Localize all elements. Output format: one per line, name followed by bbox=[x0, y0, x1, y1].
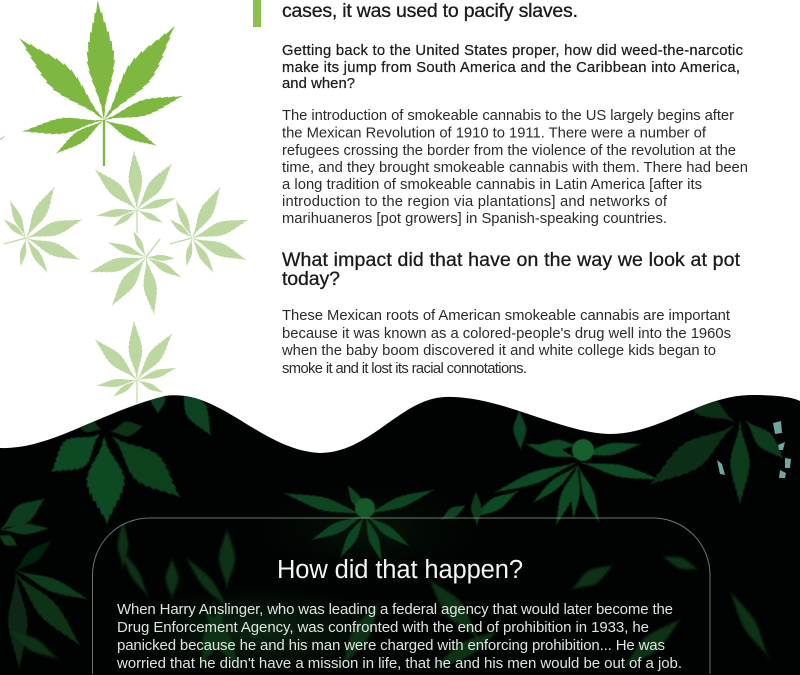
accent bar bbox=[253, 0, 261, 27]
leaves: faint inside box bbox=[5, 520, 776, 675]
impact paragraph: when the baby boom discovered it and white college kids began to bbox=[281, 343, 716, 359]
answer paragraph: refugees crossing the border from the violence of the revolution at the bbox=[282, 143, 736, 159]
impact paragraph: because it was known as a colored-people's drug well into the 1960s bbox=[282, 326, 731, 342]
question text: and when? bbox=[282, 76, 355, 92]
question text: make its jump from South America and the Caribbean into America, bbox=[282, 60, 740, 76]
answer paragraph: introduction to the region via plantations] and networks of bbox=[282, 194, 668, 210]
icon: pale cannabis leaves bbox=[0, 150, 261, 403]
heading: what impact: today? bbox=[282, 268, 340, 290]
answer paragraph: the Mexican Revolution of 1910 to 1911. There were a number of bbox=[282, 126, 707, 142]
leaf: upper left large bbox=[51, 396, 212, 524]
answer paragraph: a long tradition of smokeable cannabis in Latin America [after its bbox=[282, 177, 702, 193]
panel: rounded outline box bbox=[92, 518, 710, 674]
flower: centre bbox=[281, 482, 437, 564]
flower: upper right of centre bbox=[469, 437, 662, 528]
impact paragraph: smoke it and it lost its racial connotations. bbox=[282, 361, 527, 377]
answer paragraph: time, and they brought smokeable cannabis with them. There had been bbox=[282, 160, 748, 176]
intro text: cases, it was used to pacify slaves. bbox=[282, 0, 578, 22]
icon: large cannabis leaf bbox=[10, 0, 186, 166]
heading: how did that happen: How did that happen? bbox=[277, 556, 523, 584]
answer paragraph: marihuaneros [pot growers] in Spanish-speaking countries. bbox=[282, 211, 667, 227]
impact paragraph: These Mexican roots of American smokeable cannabis are important bbox=[282, 308, 730, 324]
box paragraph: Drug Enforcement Agency, was confronted with the end of prohibition in 1933, he bbox=[117, 619, 649, 636]
leaf: upper right dark bbox=[440, 400, 784, 526]
question text: Getting back to the United States proper, how did weed-the-narcotic bbox=[282, 43, 744, 59]
answer paragraph bbox=[282, 108, 748, 227]
panel: dark wave with cannabis photo background bbox=[0, 376, 800, 675]
specks: teal highlights bbox=[717, 421, 791, 478]
leaf: left edge bbox=[0, 490, 92, 670]
box paragraph: When Harry Anslinger, who was leading a federal agency that would later become the bbox=[117, 601, 673, 618]
heading: what impact: What impact did that have on the way we look at pot bbox=[282, 249, 741, 271]
answer paragraph: The introduction of smokeable cannabis to the US largely begins after bbox=[282, 108, 734, 124]
box paragraph bbox=[116, 601, 682, 672]
box paragraph: worried that he didn't have a mission in life, that he and his men would be out of a job. bbox=[116, 655, 682, 672]
question text bbox=[282, 43, 744, 92]
impact paragraph bbox=[281, 308, 731, 377]
heading: what impact bbox=[282, 249, 741, 290]
box paragraph: panicked because he and his man were charged with enforcing prohibition... He was bbox=[117, 637, 665, 654]
icon: clipped leaf tip bbox=[0, 135, 6, 140]
